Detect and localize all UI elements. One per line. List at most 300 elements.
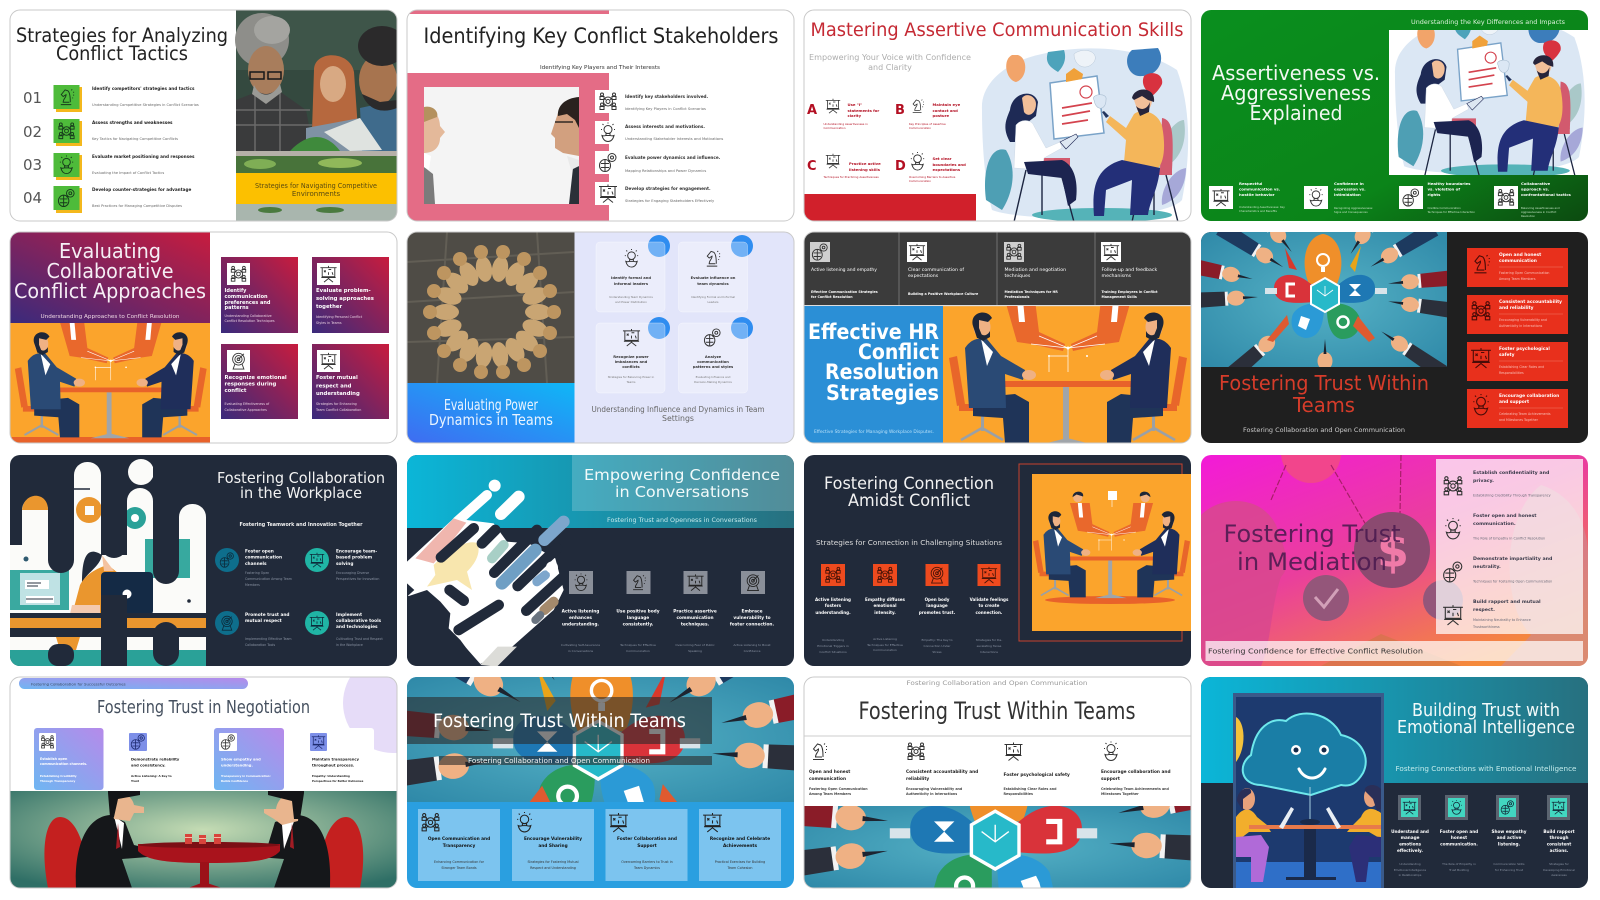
caption: Settings — [662, 414, 694, 423]
item 4: consistent — [1547, 842, 1571, 846]
column 2: Clear communication of — [908, 267, 964, 273]
yellow caption band: Environments — [292, 190, 341, 198]
card: collaboration: Overcoming Barriers to Trust in — [621, 860, 673, 864]
item: open channels: channels — [245, 561, 267, 567]
blue title block: Conflict — [858, 340, 939, 364]
card 2: Authenticity in Interactions — [1499, 324, 1543, 328]
item 1: Respectful — [1239, 181, 1262, 186]
icon column 4: foster connection. — [730, 622, 774, 628]
illustration: two businessmen playing chips — [10, 791, 397, 888]
item 3: promotes trust. — [919, 610, 956, 615]
card 4: and support — [1499, 399, 1529, 405]
heading — [217, 469, 385, 502]
heading: Identifying Key Conflict Stakeholders — [424, 24, 778, 48]
heading: Conflict Tactics — [56, 42, 188, 65]
column 4: Milestones Together — [1101, 792, 1139, 796]
item: collaborative tools: in the Workplace — [336, 643, 363, 647]
photo: ring of wooden pawns — [407, 232, 574, 383]
glass card 3: imbalances and — [615, 360, 648, 364]
item 1: fosters — [825, 603, 842, 608]
card: transparency: throughout process. — [312, 764, 355, 768]
icon column 3: Practice assertive — [673, 608, 717, 614]
card: empathy: Show empathy and — [221, 758, 261, 762]
tag pill — [19, 678, 248, 689]
column 4: Encourage collaboration and — [1101, 769, 1171, 775]
illustration: hands around pinwheel — [1179, 188, 1463, 413]
illustration: clipboard consultation — [1389, 17, 1588, 177]
heading: Assertiveness vs. — [1212, 61, 1380, 85]
item: open channels: Members — [245, 583, 260, 587]
yellow caption band — [236, 173, 397, 204]
card: achievements: Practical Exercises for Building — [715, 860, 765, 864]
item A: clarity — [848, 113, 862, 118]
panel: Strategies for Analyzing Conflict Tactics — [10, 10, 406, 221]
card: foster mutual respect: Foster mutual — [316, 375, 358, 381]
card: foster mutual respect: respect and — [316, 384, 352, 390]
subtitle band: Fostering Collaboration and Open Communication — [468, 757, 650, 765]
column 2: Authenticity in Interactions — [906, 792, 957, 796]
item: impartiality — [1444, 556, 1552, 584]
column 4: support — [1101, 776, 1120, 782]
item: collaborative tools: collaborative tools — [336, 618, 382, 624]
item 4: confrontational tactics — [1521, 192, 1572, 197]
item 4: Resolution — [1521, 214, 1535, 218]
subtitle band — [439, 756, 712, 765]
column 3: Mediation and negotiation — [1004, 267, 1066, 273]
card: identify communication preferences — [221, 257, 298, 333]
item: assess interests: Assess interests and motivations. — [625, 124, 705, 129]
item D: Set clear — [932, 156, 952, 161]
column 4: Training Employees in Conflict — [1102, 290, 1158, 294]
icon column 1 — [561, 571, 600, 653]
item 1: understanding. — [815, 610, 851, 615]
heading band: Collaborative — [46, 259, 174, 283]
card: recognize emotional responses: conflict — [224, 388, 247, 394]
heading band: Conflict Approaches — [14, 279, 206, 303]
icon column 4: Active Listening to Boost — [733, 643, 771, 647]
card 1: Fostering Open Communication — [1499, 271, 1549, 275]
dark top strip with four columns — [804, 232, 1191, 306]
panel: Building Trust with Emotional Intelligence — [1201, 677, 1588, 888]
heading band: Understanding Approaches to Conflict Resolution — [40, 314, 180, 320]
item 3: and active — [1497, 835, 1521, 840]
card: collaboration — [606, 809, 688, 881]
item 2 — [1304, 181, 1373, 214]
card 3: safety — [1499, 352, 1515, 358]
column 3: Professionals — [1004, 295, 1029, 299]
card: recognize emotional responses: Evaluating Effectiveness of — [224, 402, 270, 406]
card: vulnerability: Respect and Understanding — [530, 866, 576, 870]
card: vulnerability — [512, 809, 594, 881]
item D: D — [895, 159, 906, 174]
item 2: Trust Building — [1448, 868, 1469, 872]
white notches — [595, 90, 609, 205]
subtitle: Strategies for Connection in Challenging Situations — [816, 539, 1002, 547]
glass card 4: communication — [697, 360, 729, 364]
item 4: Validate feelings — [970, 597, 1009, 602]
card: open channels: Establishing Credibility — [40, 774, 77, 778]
list item 03: Evaluate market positioning and responses — [92, 154, 195, 159]
list item 03: 03 — [23, 156, 42, 174]
card: evaluate problem solving: Identifying Personal Conflict — [316, 315, 363, 319]
item: impartiality: neutrality. — [1473, 564, 1501, 570]
illustration: meeting at a table — [10, 323, 210, 442]
item 1: Characteristics and Benefits — [1239, 209, 1277, 213]
teal header: in Conversations — [615, 483, 749, 501]
list item 02: 02 — [23, 123, 42, 141]
glass card 1: Identify formal and — [611, 276, 651, 280]
card 4: Encourage collaboration — [1499, 393, 1559, 399]
illustration: hands around pinwheel — [364, 567, 847, 830]
item: problem solving — [305, 548, 379, 581]
item: problem solving: solving — [336, 561, 353, 567]
card 4 — [1467, 389, 1568, 428]
item: identify stakeholders: Identify key stakeholders involved. — [625, 94, 709, 99]
item 3: Healthy boundaries — [1428, 181, 1471, 186]
item: develop strategies — [599, 184, 715, 203]
item 1 — [1209, 181, 1285, 213]
heading — [824, 474, 994, 510]
subtitle: Fostering Connections with Emotional Intelligence — [1396, 765, 1576, 773]
card: open channels: Establish open — [40, 757, 68, 761]
card: empathy: understanding. — [221, 764, 253, 768]
item 2: Signs and Consequences — [1334, 210, 1368, 214]
item A: Use "I" — [848, 102, 862, 107]
item 2 — [1440, 795, 1478, 872]
item: assess interests — [601, 122, 723, 142]
card 3: Foster psychological — [1499, 346, 1550, 352]
item 2: Techniques for Effective — [866, 643, 903, 647]
card 1: Among Team Members — [1499, 277, 1536, 281]
column 1: Among Team Members — [809, 792, 851, 796]
heading: Building Trust with — [1412, 701, 1560, 721]
item 2: Foster open and — [1440, 829, 1478, 834]
card: identify communication preferences: Understanding Collaborative — [224, 314, 272, 318]
caption — [592, 405, 764, 423]
glass card 3: Teams — [626, 380, 636, 384]
item D: Overcoming Barriers to Assertive — [909, 175, 956, 179]
item: rapport — [1443, 599, 1541, 629]
glass card 1: and Power Distribution — [615, 300, 647, 304]
heading: in Mediation — [1237, 548, 1387, 576]
heading — [17, 27, 226, 60]
card: open communication: Enhancing Communication for — [434, 860, 485, 864]
card: open channels: communication channels. — [40, 762, 87, 766]
card: transparency: Maintain transparency — [312, 758, 360, 762]
glass card 1: Understanding Team Dynamics — [609, 295, 653, 299]
card: evaluate problem solving: Styles in Teams — [316, 321, 342, 325]
icon column 1: enhances — [569, 615, 592, 621]
item 2: The Role of Empathy in — [1441, 862, 1476, 866]
item 1: Emotional Triggers in — [817, 644, 849, 648]
item 3: Empathy: The Key to — [921, 638, 953, 642]
item: problem solving: Encourage team- — [336, 548, 377, 554]
glass card 1: informal leaders — [614, 282, 649, 286]
blue title block: Resolution — [825, 360, 939, 384]
column 2 — [906, 743, 978, 796]
caption: Understanding Influence and Dynamics in Team — [592, 405, 764, 414]
illustration: smiling cloud between two laptop users — [1233, 693, 1384, 888]
item 4: actions. — [1550, 848, 1569, 853]
column 4: Management Skills — [1102, 295, 1137, 299]
item D: expectations — [932, 167, 961, 172]
photo: three colleagues around a plant table — [235, 10, 406, 221]
item: assess interests: Understanding Stakeholder Interests and Motivations — [625, 137, 723, 141]
item: open channels: communication — [245, 554, 282, 560]
card: vulnerability: and Sharing — [538, 843, 568, 849]
item 1: Understanding — [822, 638, 844, 642]
background silhouettes and coins — [1201, 423, 1588, 666]
card: collaboration: Team Dynamics — [633, 866, 660, 870]
list item 02 — [23, 119, 178, 146]
list item 02: Key Tactics for Navigating Competitive Conflicts — [92, 137, 178, 141]
heading — [1397, 701, 1575, 738]
item: open channels: Communication Among Team — [245, 577, 292, 581]
illustration: dripping columns with worker at laptop — [10, 435, 206, 666]
glass card 4 — [678, 317, 753, 393]
icon column 3: communication — [676, 615, 714, 621]
item 4 — [970, 564, 1009, 654]
item 3: Techniques for Effective Interaction — [1426, 210, 1475, 214]
heading: Aggressiveness — [1221, 81, 1371, 105]
card: open communication — [418, 809, 500, 881]
item 2: Empathy diffuses — [865, 597, 906, 602]
panel: Empowering Confidence in Conversations — [407, 455, 794, 667]
card 2: Consistent accountability — [1499, 299, 1562, 305]
item C: listening skills — [849, 167, 881, 172]
list item 04: Best Practices for Managing Competitive Disputes — [92, 204, 182, 208]
item B — [895, 100, 961, 130]
item B: B — [895, 103, 905, 118]
card: achievements: Recognize and Celebrate — [710, 836, 770, 842]
heading — [1219, 371, 1429, 417]
item 1: Understanding Assertiveness: Key — [1239, 205, 1285, 209]
column 4: mechanisms — [1102, 273, 1132, 279]
glass card 3: Strategies for Balancing Power in — [608, 375, 654, 379]
card 2 — [1467, 295, 1568, 334]
pink photo panel — [407, 73, 609, 221]
column 2: Encouraging Vulnerability and — [906, 787, 963, 791]
panel: Mastering Assertive Communication Skills — [804, 10, 1191, 222]
column 1: Fostering Open Communication — [809, 787, 868, 791]
column 2: Building a Positive Workplace Culture — [908, 292, 979, 296]
card: foster mutual respect: understanding — [316, 391, 360, 397]
column 1: Active listening and empathy — [811, 267, 877, 273]
list item 01 — [23, 85, 199, 112]
subtitle: Fostering Collaboration and Open Communication — [1243, 426, 1405, 434]
list item 03: Evaluating the Impact of Conflict Tactics — [92, 171, 164, 175]
item 2: communication. — [1440, 842, 1478, 846]
card: identify communication preferences: preferences and — [224, 300, 271, 306]
item: trust and respect: Implementing Effective Team — [245, 637, 292, 641]
item 2 — [865, 564, 906, 652]
blue title block — [407, 383, 574, 443]
teal header: Fostering Trust and Openness in Conversations — [607, 517, 757, 524]
panel: Fostering Trust in Mediation — [1201, 423, 1588, 666]
card: achievements — [699, 809, 781, 881]
card 3 — [1467, 342, 1568, 381]
heading: Emotional Intelligence — [1397, 718, 1575, 738]
glass card 3 — [596, 317, 670, 393]
glass card 4: patterns and styles — [693, 365, 734, 369]
translucent list panel — [1436, 459, 1583, 634]
column 1: for Conflict Resolution — [811, 295, 853, 299]
item 4: Aggressiveness in Conflict — [1521, 210, 1556, 214]
item 4: Interactions — [980, 650, 998, 654]
item: trust and respect — [215, 611, 292, 647]
card 4: and Milestones Together — [1499, 418, 1539, 422]
item 2: Communication — [873, 648, 897, 652]
item 3: vs. violation of — [1428, 186, 1460, 192]
card: open communication: Transparency — [443, 843, 475, 849]
card: transparency — [304, 728, 374, 790]
panel: Effective HR Conflict Resolution Strategies — [804, 232, 1191, 444]
card: foster mutual respect — [312, 344, 389, 419]
card 1: communication — [1499, 258, 1537, 264]
card: identify communication preferences: Identify — [224, 288, 247, 294]
column 4: Follow-up and feedback — [1102, 267, 1157, 273]
item 3: Connection Under — [923, 644, 951, 648]
panel: Identifying Key Conflict Stakeholders — [407, 10, 794, 221]
panel: Fostering Trust Within Teams (dark) — [1179, 188, 1588, 443]
icon column 3 — [673, 571, 717, 653]
card: identify communication preferences: Conflict Resolution Techniques — [224, 319, 275, 323]
item 3: Open body — [925, 597, 950, 602]
card: recognize emotional responses: Collaborative Approaches — [224, 408, 267, 412]
item: rapport: Trustworthiness — [1472, 625, 1500, 629]
panel: Assertiveness vs. Aggressiveness Explained — [1201, 10, 1588, 221]
item D — [895, 152, 966, 183]
subtitle: Identifying Key Players and Their Interests — [540, 65, 660, 71]
glass card 3: Recognize power — [613, 355, 649, 359]
card: open communication: Stronger Team Bonds — [441, 866, 477, 870]
icon column 4: Confidence — [744, 649, 761, 653]
card 2: and reliability — [1499, 305, 1534, 311]
heading — [1212, 61, 1380, 125]
card 4: Celebrating Team Achievements — [1499, 412, 1551, 416]
card: recognize emotional responses: responses during — [224, 382, 277, 388]
item C: Practice active — [849, 161, 881, 166]
item 4: to create — [979, 603, 1000, 608]
panel: Fostering Trust Within Teams (white) — [761, 657, 1244, 894]
heading — [1224, 520, 1400, 576]
icon column 4: vulnerability to — [733, 615, 771, 621]
item: impartiality: Demonstrate impartiality and — [1473, 556, 1552, 562]
item 4 — [1494, 181, 1572, 218]
card: reliability: and consistency. — [131, 764, 166, 768]
item 2: Active Listening — [873, 637, 897, 641]
item C — [807, 154, 881, 179]
item 3: language — [926, 603, 948, 608]
item: identify stakeholders: Identifying Key Players in Conflict Scenarios — [625, 107, 706, 111]
panel: Fostering Trust in Negotiation — [10, 653, 443, 888]
item 3: rights — [1428, 192, 1441, 197]
teal header — [407, 455, 794, 528]
column 4: Celebrating Team Achievements and — [1101, 787, 1170, 791]
item 1 — [815, 564, 851, 654]
item 4: Collaborative — [1521, 181, 1551, 186]
list item 04 — [23, 186, 191, 213]
item: honest communication: The Role of Empathy in Conflict Resolution — [1472, 536, 1545, 540]
card 3: Establishing Clear Roles and — [1499, 365, 1544, 369]
item: evaluate power — [600, 154, 721, 173]
framed illustration: four colleagues at a table — [1019, 464, 1191, 641]
item 2: intimidation — [1334, 192, 1361, 197]
card: open channels — [34, 728, 104, 790]
item: evaluate power: Mapping Relationships and Power Dynamics — [625, 169, 706, 173]
item 3: Show empathy — [1492, 829, 1527, 834]
card 1: Open and honest — [1499, 252, 1541, 258]
heading band — [10, 232, 210, 323]
card: collaboration: Foster Collaboration and — [617, 836, 677, 842]
item 4: Developing Emotional — [1543, 868, 1575, 872]
item 4: Build rapport — [1543, 829, 1575, 834]
item 4: escalating Tense — [977, 644, 1002, 648]
item: collaborative tools: and technologies — [336, 624, 378, 630]
glass card 2: Identifying Formal and Informal — [691, 295, 735, 299]
icon column 2: Use positive body — [616, 608, 660, 614]
illustration: hands around pinwheel — [761, 657, 1244, 894]
icon column 2: consistently. — [623, 622, 654, 628]
item 1: emotions — [1399, 842, 1421, 846]
item: open channels: Foster open — [245, 548, 274, 554]
card: collaboration: Support — [637, 843, 657, 849]
heading band: Evaluating — [59, 239, 161, 263]
item 1: effectively. — [1397, 848, 1423, 853]
column 1 — [810, 242, 878, 299]
panel: Evaluating Collaborative Conflict Approaches — [10, 232, 397, 443]
icon column 4: Embrace — [742, 608, 763, 614]
teal header: Empowering Confidence — [584, 466, 780, 484]
column 2: expectations — [908, 273, 939, 279]
item: identify stakeholders — [600, 93, 709, 111]
item B: posture — [932, 113, 949, 118]
tagline: Understanding the Key Differences and Impacts — [1411, 19, 1565, 26]
column 3: techniques — [1004, 273, 1031, 279]
column 4 — [1101, 242, 1158, 299]
item C: Techniques for Practicing Assertiveness — [822, 175, 879, 179]
item: honest communication — [1445, 513, 1545, 540]
icon column 2 — [616, 571, 660, 653]
item 2: intensity. — [874, 610, 896, 615]
item: rapport: Maintaining Neutrality to Enhance — [1473, 618, 1531, 622]
item: impartiality: Techniques for Fostering Open Communication — [1472, 580, 1552, 584]
item 2: Recognizing Aggressiveness: — [1334, 206, 1373, 210]
list item 03 — [23, 153, 195, 180]
item 3: Communication Skills — [1493, 862, 1525, 866]
item 1: Emotional Intelligence — [1394, 868, 1426, 872]
item 3 — [919, 564, 956, 654]
item: confidentiality — [1444, 470, 1551, 498]
item 2: Confidence in — [1334, 181, 1364, 186]
item: collaborative tools: Implement — [336, 612, 362, 618]
glass card 2 — [678, 235, 753, 312]
heading: Fostering Connection — [824, 474, 994, 493]
icon column 1: in Conversations — [568, 649, 593, 653]
glass card 2: Leaders — [707, 300, 719, 304]
title band — [407, 697, 712, 744]
blue title block: Effective HR — [808, 320, 939, 344]
heading: Fostering Trust — [1224, 520, 1400, 548]
panel: Fostering Collaboration in the Workplace — [10, 435, 397, 666]
item A: Communication — [824, 126, 846, 130]
card: open channels: Through Transparency — [40, 779, 75, 783]
item 4: Awareness — [1551, 873, 1567, 877]
card: achievements: Achievements — [723, 843, 757, 849]
item: collaborative tools: Cultivating Trust and Respect — [336, 637, 383, 641]
item: develop strategies: Develop strategies for engagement. — [625, 186, 711, 191]
item 4: approach vs. — [1521, 186, 1550, 192]
